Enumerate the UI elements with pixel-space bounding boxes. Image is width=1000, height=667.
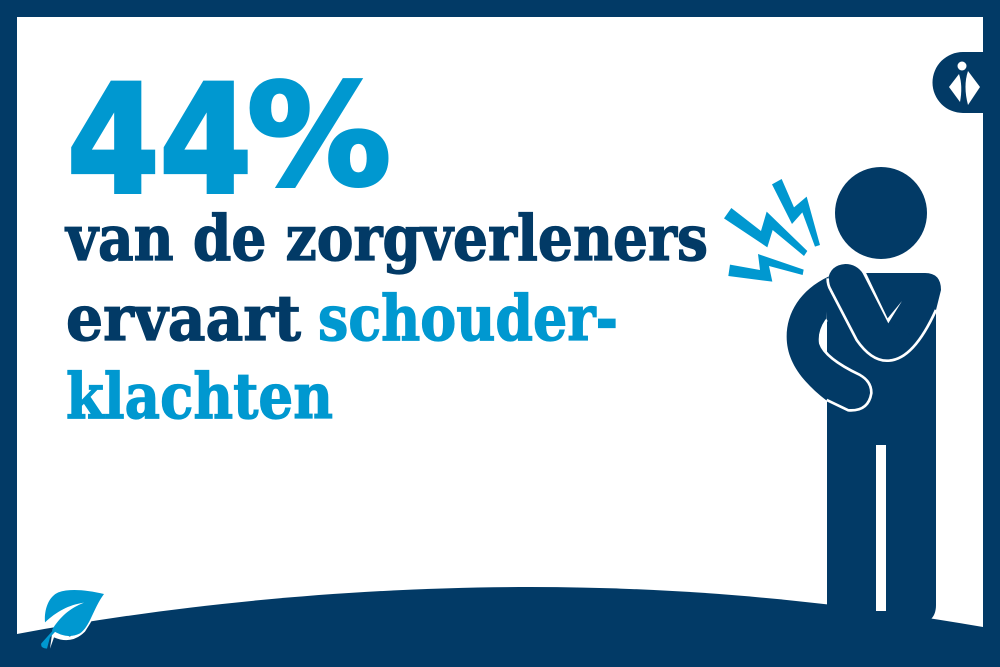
leg gap: [876, 445, 886, 611]
heading line 1: van de zorgverleners: [64, 201, 708, 275]
bolt bottom: [728, 254, 804, 282]
forearm outline: [828, 278, 936, 361]
lower arm: [787, 277, 871, 410]
heading line 3: klachten: [66, 359, 333, 433]
bolt middle: [724, 208, 807, 256]
badge logo: [932, 52, 983, 113]
heading line 2 blue: schouder-: [318, 281, 618, 355]
head: [835, 167, 927, 259]
arm details: [787, 264, 936, 410]
big number: 44: [67, 54, 252, 228]
leaf body: [45, 590, 104, 636]
white wedge beside arm: [819, 318, 827, 354]
torso and legs: [827, 273, 941, 620]
icon: pain bolts: [724, 179, 820, 282]
bolt top: [772, 179, 820, 247]
badge shape: [932, 52, 983, 113]
heading line 2 dark: ervaart: [66, 281, 301, 355]
forearm: [828, 264, 913, 361]
leaf stem: [41, 630, 55, 649]
forearm V notch: [862, 272, 902, 323]
logo right diamond: [966, 71, 980, 105]
lower arm outline: [820, 320, 871, 410]
percent sign: %: [247, 55, 391, 218]
logo left diamond: [949, 74, 961, 102]
logo dot: [958, 62, 966, 70]
leaf logo: [41, 590, 105, 649]
leaf white edge: [50, 594, 105, 649]
ground curve: [17, 587, 983, 667]
icon: person with shoulder pain: [787, 167, 941, 620]
